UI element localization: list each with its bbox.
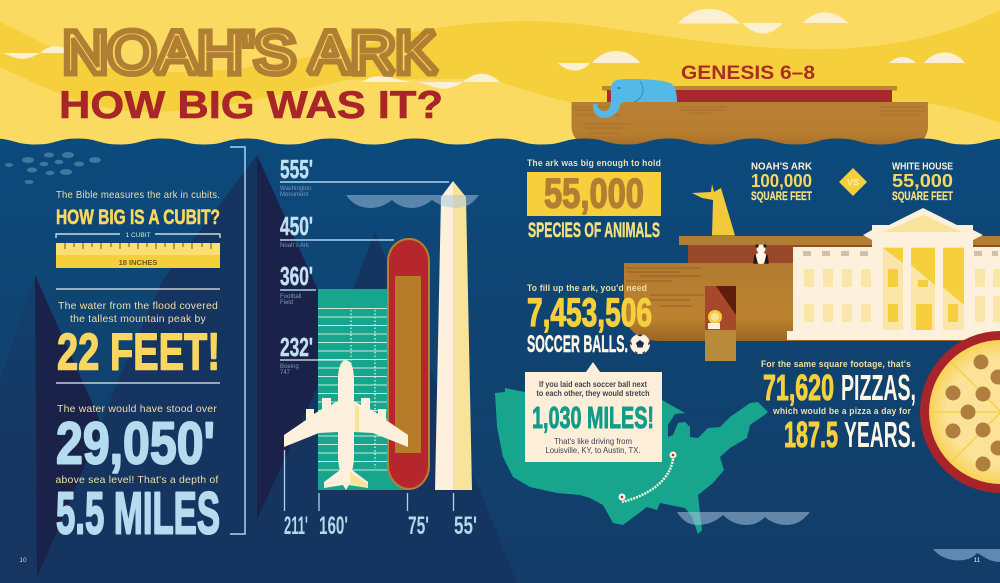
soccer ball section (527, 283, 652, 358)
upper cabin (688, 245, 1000, 263)
callout note (546, 437, 640, 455)
elephant (593, 79, 677, 118)
wood grain (572, 107, 925, 133)
square footage comparison (751, 160, 953, 203)
cloud bottom right (933, 549, 1000, 562)
1,030 miles figure: 1,030 MILES! (532, 400, 654, 435)
soccer intro: To fill up the ark, you'd need (527, 283, 647, 294)
555 ft marker: 555' (280, 154, 313, 184)
White House stat (892, 160, 953, 203)
width markers: 75' (408, 512, 429, 540)
callout note: Louisville, KY, to Austin, TX. (546, 446, 640, 455)
door (705, 286, 736, 330)
pin: Austin (618, 494, 626, 500)
width markers: 55' (454, 512, 477, 540)
height bracket (230, 147, 245, 534)
cubit intro: The Bible measures the ark in cubits. (56, 189, 220, 201)
pizza a day text: which would be a pizza a day for (772, 406, 911, 417)
cubit label: 1 CUBIT (126, 232, 150, 239)
White House stat: SQUARE FEET (892, 189, 953, 203)
width markers: 211' (284, 512, 308, 540)
species intro: The ark was big enough to hold (527, 158, 661, 169)
title: Noah's Ark: NOAH'S ARK (63, 20, 437, 86)
flood depth text: The water from the flood covered (58, 300, 218, 312)
360 ft marker: Field (280, 300, 293, 306)
cubit heading: HOW BIG IS A CUBIT? (56, 206, 220, 229)
sky background (0, 0, 1000, 150)
page number 11: 11 (974, 557, 981, 564)
pizza stats (761, 359, 916, 455)
450 ft marker: 450' (280, 211, 313, 241)
callout (525, 362, 662, 462)
panda (754, 244, 768, 264)
divider (56, 382, 220, 384)
hull (624, 263, 1000, 341)
middle mountain (37, 155, 517, 583)
title: Noah's Ark: NOAH'S ARK (63, 20, 437, 86)
ark cabin (607, 90, 892, 102)
7,453,506 figure: 7,453,506 (527, 291, 652, 335)
Noah's Ark stat: 100,000 (751, 171, 812, 191)
width markers: 160' (319, 512, 348, 540)
555 ft marker (280, 154, 449, 198)
55,000 figure: 55,000 (544, 170, 644, 216)
subtitle: How big was it?: HOW BIG WAS IT? (59, 84, 443, 127)
232 ft marker: 232' (280, 332, 313, 362)
White House stat: 55,000 (892, 171, 953, 191)
450 ft marker: Noah's Ark (280, 243, 310, 249)
ark top view (388, 239, 429, 489)
size comparison chart (280, 154, 479, 540)
cloud over monument (346, 195, 479, 208)
ruler: 18 INCHES (119, 258, 157, 267)
giraffe (692, 184, 735, 236)
plank lines (626, 268, 704, 306)
360 ft marker: Football (280, 294, 301, 300)
232 ft marker: 747 (280, 370, 291, 376)
roof balusters (804, 251, 997, 256)
dark left peak (35, 275, 102, 578)
71,620 figure: 71,620 (763, 367, 834, 408)
route (622, 459, 673, 502)
Noah's Ark stat (751, 160, 812, 203)
width markers (284, 450, 477, 540)
Washington Monument (435, 181, 472, 490)
callout intro (536, 380, 650, 398)
sky band (0, 10, 1000, 123)
360 ft marker (280, 261, 316, 306)
icon: VS diamond (839, 168, 867, 196)
mountains (0, 155, 517, 583)
sea level text: The water would have stood over (57, 403, 217, 415)
White House stat: WHITE HOUSE (892, 160, 953, 172)
top ark (572, 63, 928, 146)
species label: SPECIES OF ANIMALS (528, 219, 660, 242)
pediment (863, 208, 983, 247)
far-left slope (0, 275, 37, 583)
dark center peak (257, 155, 318, 520)
big ark side view (624, 184, 1000, 361)
232 ft marker: Boeing (280, 364, 299, 370)
White House (787, 208, 1000, 340)
fish school (5, 152, 101, 184)
deck roof (679, 236, 1000, 245)
555 ft marker: Washington (280, 186, 311, 192)
cloud over Florida (677, 512, 810, 525)
cubit bracket (56, 234, 220, 238)
soccer balls label: SOCCER BALLS. (527, 331, 628, 358)
ruler (56, 243, 220, 268)
flood depth text: the tallest mountain peak by (70, 313, 207, 325)
cubit section (56, 189, 220, 268)
55,000 box (527, 172, 661, 216)
5.5 miles figure: 5.5 MILES (56, 480, 220, 546)
Genesis label: GENESIS 6–8 (681, 63, 815, 84)
pizzas label: PIZZAS, (841, 367, 916, 408)
pizza intro: For the same square footage, that's (761, 359, 911, 370)
building body (793, 247, 1000, 332)
ark roof (602, 86, 897, 90)
pizza (920, 331, 1000, 493)
747 airplane (284, 360, 408, 490)
Noah's Ark stat: SQUARE FEET (751, 189, 812, 203)
page number 10: 10 (19, 557, 27, 564)
ark hull (572, 102, 928, 146)
360 ft marker: 360' (280, 261, 313, 291)
football field (318, 289, 410, 490)
portico columns (872, 247, 973, 332)
pin: Louisville (670, 452, 676, 458)
callout intro: If you laid each soccer ball next (539, 380, 647, 389)
callout note: That's like driving from (554, 437, 632, 446)
base (787, 331, 1000, 340)
450 ft marker (280, 211, 394, 249)
29,050 figure: 29,050' (56, 410, 215, 476)
divider (56, 288, 220, 290)
depth text: above sea level! That's a depth of (56, 474, 218, 486)
icon: VS diamond: VS (847, 178, 859, 188)
22 feet figure: 22 FEET! (57, 324, 220, 382)
map of the USA (495, 388, 768, 534)
species section (527, 158, 661, 242)
ramp (705, 330, 736, 361)
lion (708, 310, 722, 329)
flood depth text (58, 300, 218, 325)
callout intro: to each other, they would stretch (536, 389, 650, 398)
icon: soccer ball (630, 334, 650, 354)
232 ft marker (280, 332, 345, 376)
years label: YEARS. (844, 414, 916, 455)
clouds in the sky (0, 9, 965, 89)
sea (0, 138, 1000, 583)
555 ft marker: Monument (280, 192, 309, 198)
callout box (525, 362, 662, 462)
Noah's Ark stat: NOAH'S ARK (751, 160, 812, 172)
187.5 figure: 187.5 (784, 414, 838, 455)
windows (804, 269, 1000, 322)
